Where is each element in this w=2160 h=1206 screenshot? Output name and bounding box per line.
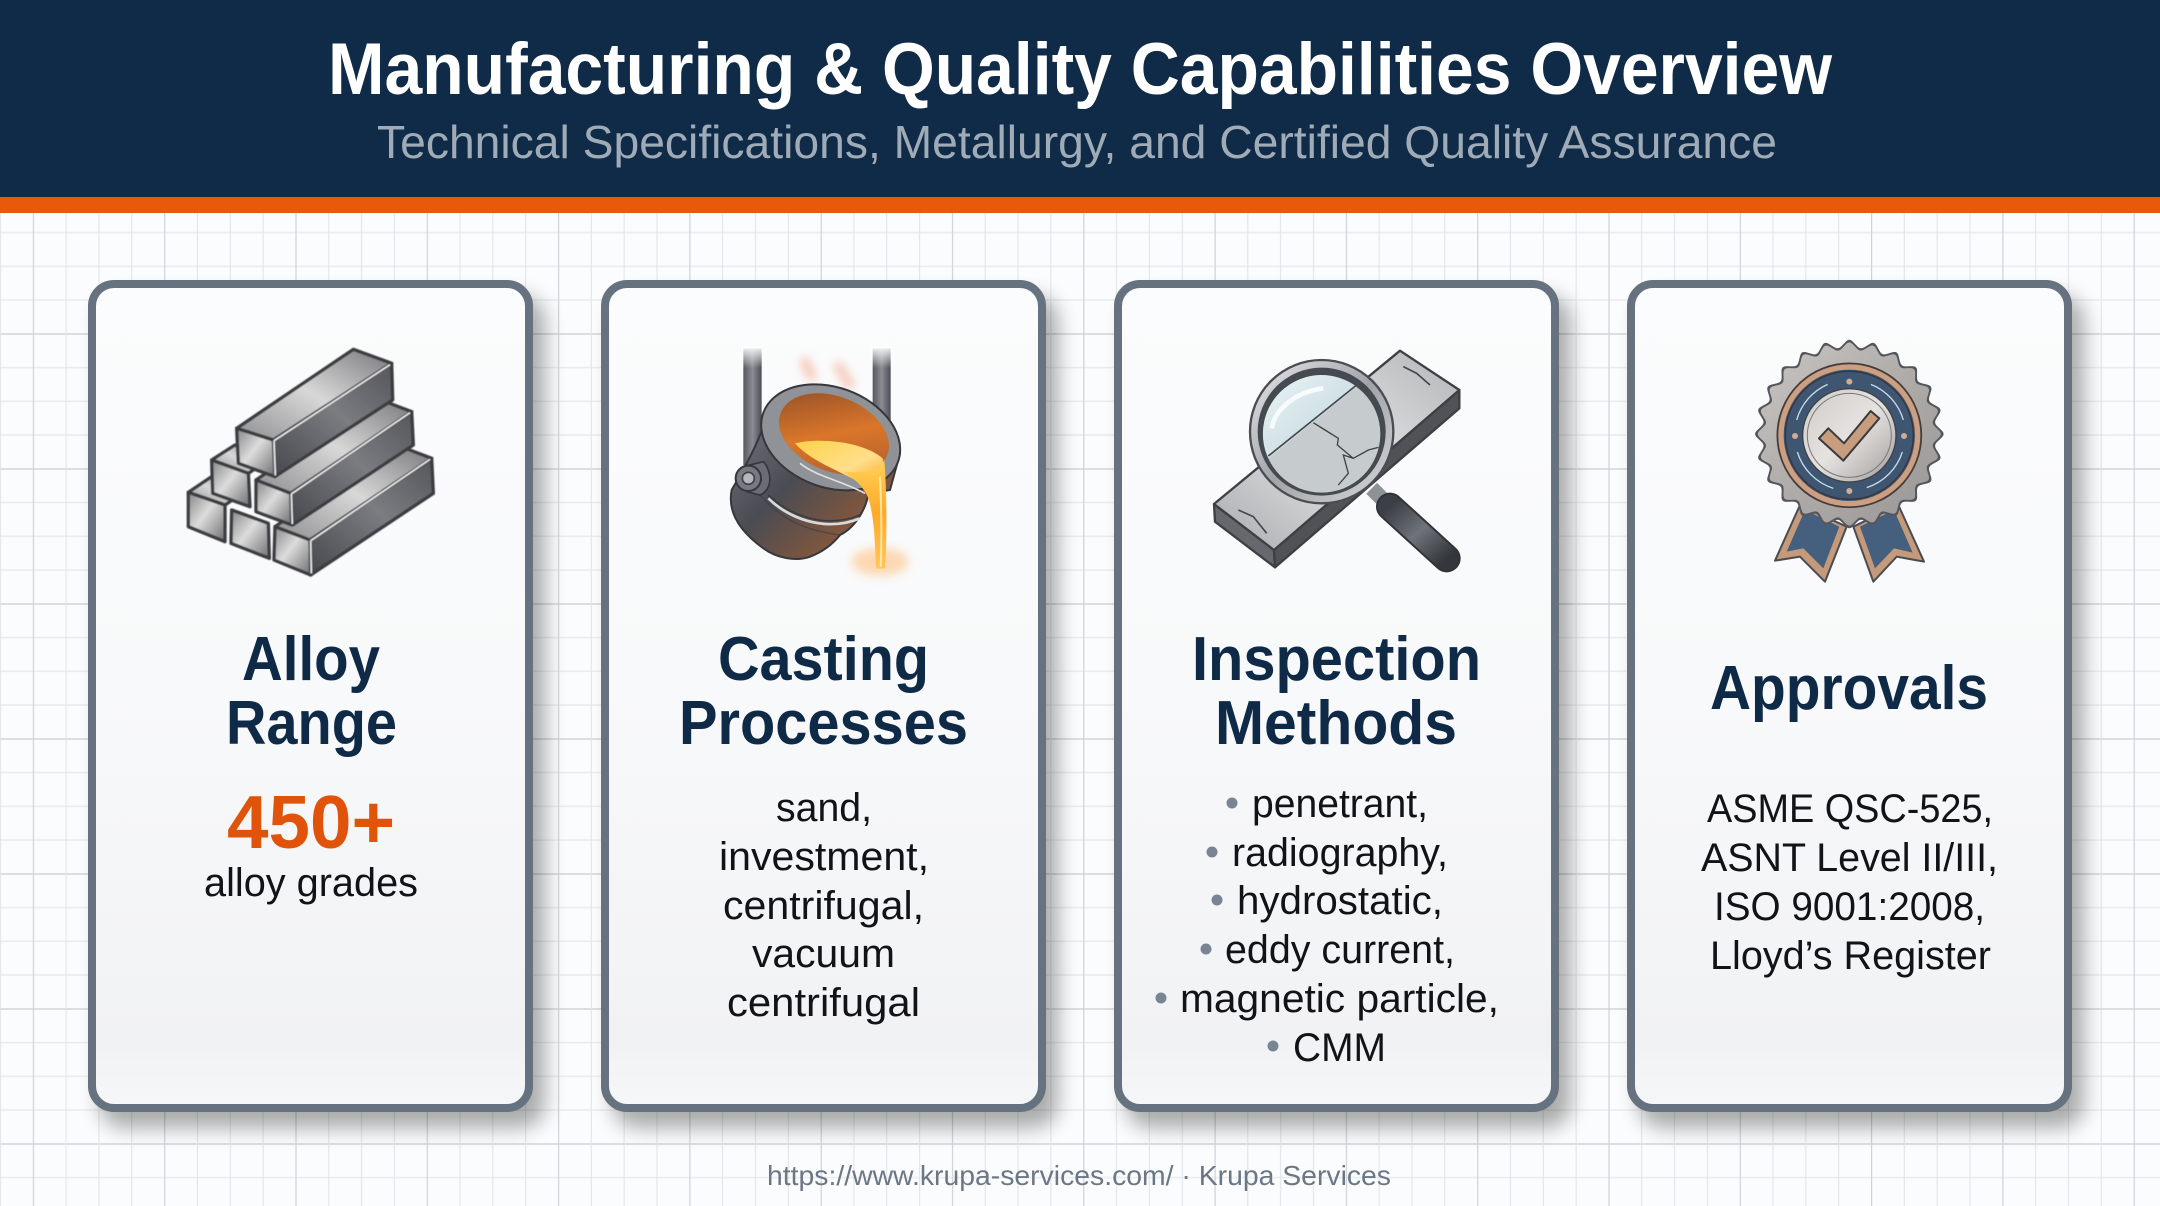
text: approvals list: ASNT Level II/III,	[1701, 836, 1998, 880]
text: inspection list: penetrant,	[1252, 782, 1428, 826]
text: casting list: centrifugal	[727, 981, 920, 1025]
text: casting list: sand,	[776, 786, 872, 830]
heading: alloy range: Alloy	[242, 625, 380, 694]
text: approvals list: ASME QSC-525,	[1707, 787, 1993, 831]
text: inspection list: hydrostatic,	[1237, 879, 1443, 923]
text: casting list: centrifugal,	[723, 884, 924, 928]
icon: metal ingots	[188, 349, 433, 575]
card body	[1118, 284, 1555, 1108]
icon: certification rosette	[1753, 338, 1945, 582]
card shadow	[1639, 296, 2084, 1128]
panel: alloy range	[92, 284, 545, 1128]
title: Manufacturing & Quality Capabilities Overview	[328, 29, 1832, 110]
heading: casting processes: Casting	[718, 625, 929, 694]
text: inspection list: radiography,	[1232, 831, 1448, 875]
text: inspection list	[1156, 782, 1499, 1070]
panel: casting processes	[605, 284, 1058, 1128]
stat label: alloy grades	[204, 861, 418, 905]
card shadow	[613, 296, 1058, 1128]
subtitle: Technical Specifications, Metallurgy, and Certified Quality Assurance	[377, 116, 1777, 168]
text: inspection list: eddy current,	[1225, 928, 1455, 972]
panel: approvals	[1631, 284, 2084, 1128]
text: approvals list	[1701, 787, 1998, 978]
text: casting list: investment,	[719, 835, 929, 879]
text: inspection list: magnetic particle,	[1180, 977, 1499, 1021]
text: inspection list: CMM	[1293, 1026, 1386, 1070]
heading: alloy range	[226, 625, 397, 758]
icon: pouring ladle	[731, 347, 915, 576]
card shadow	[100, 296, 545, 1128]
heading: casting processes	[679, 625, 968, 758]
footer source line: https://www.krupa-services.com/ · Krupa Services	[767, 1160, 1391, 1191]
heading: casting processes: Processes	[679, 689, 968, 758]
card body	[92, 284, 529, 1108]
header banner	[0, 0, 2160, 213]
heading: inspection methods: Methods	[1215, 689, 1457, 758]
heading: inspection methods	[1192, 625, 1481, 758]
heading: inspection methods: Inspection	[1192, 625, 1481, 694]
heading: alloy range: Range	[226, 689, 397, 758]
panel: inspection methods	[1118, 284, 1571, 1128]
card shadow	[1126, 296, 1571, 1128]
card body	[605, 284, 1042, 1108]
text: approvals list: Lloyd’s Register	[1710, 934, 1991, 978]
text: approvals list: ISO 9001:2008,	[1714, 885, 1985, 929]
text: casting list: vacuum	[752, 932, 895, 976]
orange accent bar	[0, 197, 2160, 213]
heading: approvals: Approvals	[1710, 654, 1988, 723]
icon: magnifier over metal bar	[1214, 351, 1459, 567]
stat: 450+: 450+	[227, 780, 395, 864]
card body	[1631, 284, 2068, 1108]
text: casting list	[719, 786, 929, 1025]
